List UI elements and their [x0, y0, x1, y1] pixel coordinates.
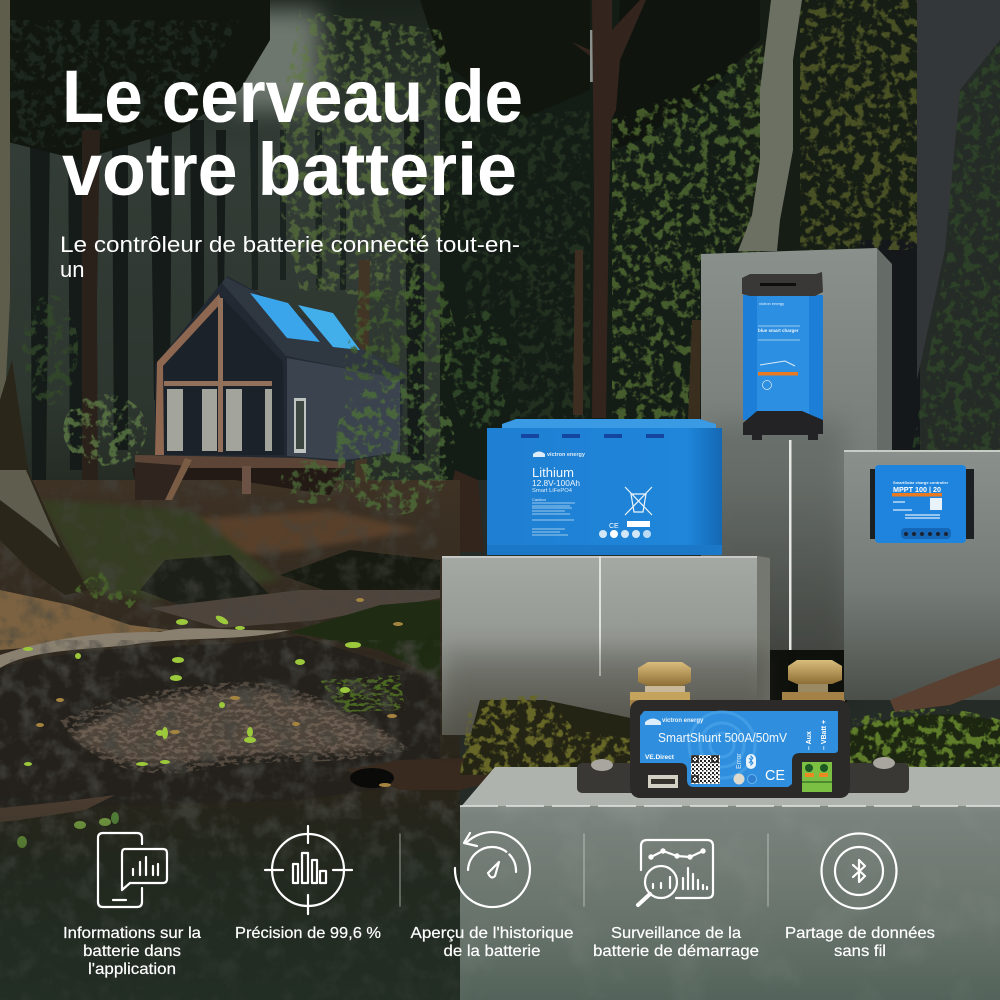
product: battery: 12.8V-100Ah — [532, 479, 580, 488]
feature labels: de la batterie — [444, 943, 541, 960]
dividers — [400, 834, 768, 906]
product: battery: CE — [609, 523, 619, 530]
title: Le cerveau de — [62, 55, 523, 138]
product: SmartShunt: SmartShunt 500A/50mV — [658, 731, 788, 745]
product: battery — [487, 419, 722, 555]
feature row — [98, 826, 896, 914]
feature labels: Aperçu de l'historique — [410, 925, 574, 942]
product: MPPT controller: MPPT 100 | 20 — [893, 485, 941, 494]
concrete block: foreground — [460, 767, 1000, 1000]
foliage canopy — [0, 0, 1000, 450]
product: blue smart charger — [742, 272, 823, 440]
product: SmartShunt: – VBatt + — [821, 720, 828, 750]
fern — [72, 570, 145, 608]
feature labels: Partage de données — [785, 925, 935, 942]
bottom-left dark overlay — [0, 790, 460, 1000]
gap behind middle block — [757, 650, 847, 710]
product: SmartShunt: – Aux — [806, 731, 813, 750]
shunt label: victron energy — [662, 718, 704, 724]
product: battery: victron energy — [547, 452, 586, 458]
root behind shunt — [890, 658, 1000, 712]
ground: moss bank — [290, 600, 440, 680]
forest floor — [0, 480, 540, 1000]
product: SmartShunt: Error — [736, 753, 743, 769]
feature labels: Précision de 99,6 % — [235, 925, 381, 942]
house — [132, 276, 408, 500]
shrubs — [22, 270, 510, 515]
ground ferns and seedlings — [17, 598, 403, 848]
icon: recycling bin crossed — [625, 487, 652, 515]
product: blue smart charger: blue smart charger — [758, 328, 799, 333]
feature labels: batterie dans — [83, 943, 181, 960]
bolts — [630, 660, 845, 775]
icon: target with bars — [265, 826, 352, 914]
product: SmartShunt: VE.Direct — [645, 754, 675, 761]
feature labels: batterie de démarrage — [593, 943, 759, 960]
product: battery: Caution — [532, 497, 546, 502]
ground: mossy slope — [40, 500, 280, 600]
title — [62, 55, 523, 211]
product: SmartShunt: CE — [765, 767, 785, 784]
left tree root — [0, 360, 88, 595]
ground: dark rocks — [140, 555, 270, 605]
concrete block: right — [844, 450, 1000, 700]
ground: lit leaf litter — [0, 590, 170, 650]
dark canopy — [0, 0, 760, 160]
subtitle — [60, 232, 520, 282]
product: MPPT controller — [870, 465, 974, 543]
product: battery: Lithium — [532, 465, 574, 480]
concrete block: back tall — [701, 248, 892, 710]
ground: dark slope — [0, 636, 440, 810]
ground: lit path behind — [180, 510, 420, 560]
icon: history gauge — [455, 832, 530, 907]
icon: magnifier dashboard — [638, 840, 713, 905]
subtitle: Le contrôleur de batterie connecté tout-en- — [60, 232, 520, 257]
product: blue smart charger: victron energy — [759, 301, 784, 306]
title: votre batterie — [62, 128, 517, 211]
concrete block: middle — [442, 556, 772, 740]
green connector — [802, 762, 832, 792]
feature labels: l'application — [88, 961, 176, 978]
icon: bluetooth — [822, 834, 896, 908]
ground: lit earth band — [70, 690, 400, 764]
product: battery: Smart LiFePO4 — [532, 488, 572, 494]
forest sky and distant trees — [0, 0, 920, 500]
product: MPPT controller: SmartSolar charge controller — [893, 480, 949, 485]
subtitle: un — [60, 257, 84, 282]
ground: root ridge — [0, 628, 290, 668]
feature labels: Surveillance de la — [611, 925, 741, 942]
plants in front of blocks — [460, 695, 1000, 775]
feature labels — [63, 925, 935, 978]
ground: stone band — [150, 590, 440, 628]
feature labels: sans fil — [834, 943, 886, 960]
product: SmartShunt — [577, 660, 909, 798]
feature labels: Informations sur la — [63, 925, 201, 942]
tree trunks — [0, 0, 1000, 552]
icon: phone with chat chart — [98, 833, 167, 907]
